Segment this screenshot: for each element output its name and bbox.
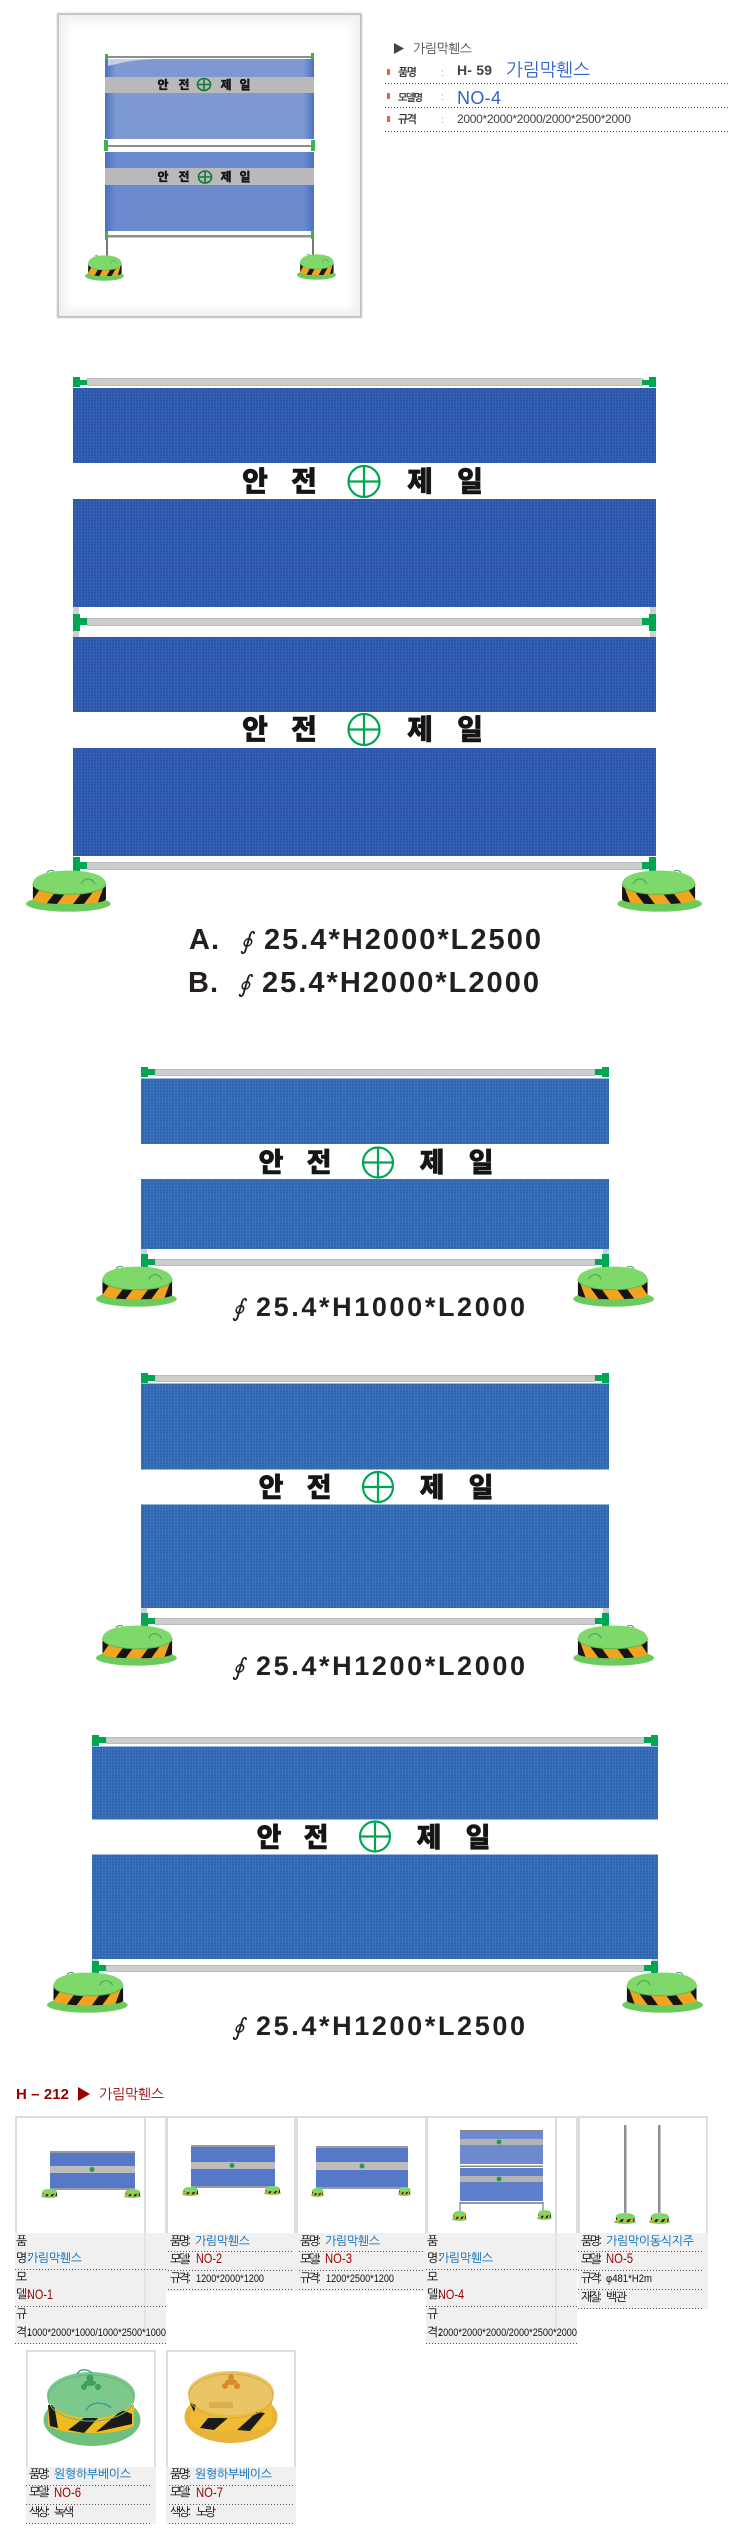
card: NO-4: 규: [427, 2308, 438, 2320]
card: NO-3: NO-3: [325, 2250, 352, 2266]
card: NO-5: [578, 2117, 708, 2309]
card: NO-5: 백관: [606, 2291, 627, 2303]
diagram: fence H1200 L2500: 제: [417, 1816, 441, 1855]
diagram: fence H1200 L2000: 제: [420, 1466, 444, 1505]
card: NO-4: 가림막휀스: [438, 2251, 493, 2264]
panel: product photo frame: [57, 13, 362, 318]
dimension label B: 25.4*H2000*L2000: [262, 967, 539, 999]
card: NO-1: [15, 2117, 166, 2344]
dimension label A: ∮: [240, 927, 256, 955]
diagram: fence H1000 L2000: [96, 1067, 654, 1307]
card: NO-4: 모: [427, 2271, 438, 2283]
dimension label H1200 L2500: ∮: [232, 2013, 248, 2041]
card: NO-1: 격:: [16, 2326, 31, 2338]
diagram: fence H1200 L2000: [96, 1373, 654, 1666]
thumbnail fence: [452, 2130, 552, 2221]
card: NO-1: 규: [16, 2308, 27, 2320]
sign text 1: 일: [457, 460, 483, 500]
card: NO-7: [166, 2351, 296, 2524]
mesh panels: [73, 388, 656, 856]
diagram: fence H1200 L2000: 전: [307, 1466, 331, 1505]
thumbnail: yellow round base: [184, 2371, 278, 2443]
card: NO-1: 1000*2000*1000/1000*2500*1000: [27, 2327, 166, 2339]
card: NO-7: 노랑: [196, 2505, 216, 2518]
card: NO-2: NO-2: [196, 2250, 222, 2266]
card: NO-7: 모델:: [170, 2486, 191, 2498]
diagram: fence H1200 L2500: 안: [257, 1816, 282, 1855]
card: NO-5: 모델:: [581, 2253, 602, 2265]
card: NO-4: NO-4: [438, 2286, 464, 2302]
photo: fence with two panels: 전: [178, 168, 190, 185]
card: NO-1: 모: [16, 2271, 27, 2283]
photo: fence with two panels: [85, 53, 336, 281]
diagram: fence H1000 L2000: 제: [420, 1141, 444, 1180]
sign text 1: 전: [291, 460, 317, 500]
diagram: double fence A/B: [26, 377, 702, 912]
product info row: model: :: [441, 92, 444, 103]
product info row: name: 품 명: [398, 66, 417, 78]
card: NO-6: [26, 2351, 156, 2524]
card: NO-1: NO-1: [27, 2286, 53, 2302]
sign text 2: 전: [291, 708, 317, 748]
sign text 1: 안: [242, 460, 268, 500]
dimension label H1200 L2500: 25.4*H1200*L2500: [256, 2011, 525, 2041]
sign text 1: 제: [407, 460, 433, 500]
diagram: fence H1000 L2000: 안: [259, 1141, 284, 1180]
sign text 2: 제: [407, 708, 433, 748]
card: NO-3: 품명:: [300, 2235, 321, 2247]
card: NO-2: 모델:: [170, 2253, 191, 2265]
card: NO-7: NO-7: [196, 2484, 223, 2500]
product info row: model: 모델명: [398, 92, 423, 103]
card: NO-5: 품명:: [581, 2235, 602, 2247]
card: NO-6: 모델:: [29, 2486, 50, 2498]
card: NO-3: 가림막휀스: [325, 2234, 380, 2247]
section heading H-212: H – 212: [16, 2086, 69, 2103]
product info heading: 가림막휀스: [413, 42, 472, 55]
card: NO-1: 명:: [16, 2252, 31, 2264]
card: NO-2: 가림막휀스: [195, 2234, 250, 2247]
section heading H-212: [16, 2086, 164, 2103]
photo: fence with two panels: 일: [239, 76, 251, 93]
dimension label H1000: ∮: [232, 1294, 248, 1322]
photo: fence with two panels: 제: [220, 76, 232, 93]
photo: fence with two panels: 제: [220, 168, 232, 185]
diagram: fence H1000 L2000: 일: [469, 1141, 493, 1180]
card: NO-4: 품: [427, 2235, 438, 2247]
card: NO-6: NO-6: [54, 2484, 81, 2500]
diagram: fence H1200 L2000: 일: [469, 1466, 493, 1505]
dimension label H1200 L2000: ∮: [232, 1653, 248, 1681]
card: NO-4: [426, 2117, 577, 2344]
product info row: spec: 규 격: [398, 113, 417, 125]
dimension label H1200 L2000: 25.4*H1200*L2000: [256, 1651, 525, 1681]
card: NO-5: φ481*H2m: [606, 2273, 652, 2285]
dimension label H1000: 25.4*H1000*L2000: [256, 1292, 525, 1322]
card: NO-6: 녹색: [54, 2506, 74, 2518]
thumbnail fence: [182, 2145, 281, 2196]
product info row: name: H- 59: [457, 62, 492, 78]
product info row: spec: [385, 112, 730, 132]
dimension label A: A.: [189, 924, 219, 956]
thumbnail: green round base: [44, 2370, 140, 2446]
diagram: fence H1200 L2500: [47, 1735, 703, 2013]
product info row: model: [385, 88, 730, 108]
photo: fence with two panels: 일: [239, 168, 251, 185]
card: NO-3: [296, 2117, 426, 2291]
diagram: fence H1000 L2000: 전: [307, 1141, 331, 1180]
product info row: name: 가림막휀스: [506, 61, 590, 79]
card: NO-5: 규격:: [581, 2272, 602, 2284]
sign text 2: 일: [457, 708, 483, 748]
thumbnail fence: [41, 2151, 141, 2198]
card: NO-7: 색상:: [170, 2506, 191, 2518]
card: NO-6: 원형하부베이스: [54, 2468, 131, 2480]
card: NO-5: NO-5: [606, 2250, 633, 2266]
diagram: fence H1200 L2500: 전: [304, 1816, 328, 1855]
product info row: spec: :: [441, 115, 444, 126]
thumbnail poles: [614, 2125, 670, 2224]
dimension label B: ∮: [238, 970, 254, 998]
product info row: name: :: [441, 68, 444, 79]
card: NO-7: 품명:: [170, 2468, 191, 2480]
card: NO-1: 품: [16, 2235, 27, 2247]
sign text 2: [242, 708, 483, 748]
connectors: [73, 377, 656, 387]
card: NO-4: 명:: [427, 2252, 442, 2264]
diagram: fence H1200 L2500: 일: [466, 1816, 490, 1855]
card: NO-1: 가림막휀스: [27, 2251, 82, 2264]
card: NO-4: 델:: [427, 2288, 442, 2300]
concrete bases: [26, 870, 111, 912]
card: NO-1: 델:: [16, 2288, 31, 2300]
product info row: name: [385, 61, 730, 84]
product info row: spec: 2000*2000*2000/2000*2500*2000: [457, 112, 631, 126]
photo: fence with two panels: 안: [157, 168, 169, 185]
product info row: model: NO-4: [457, 88, 501, 108]
sign text 2: 안: [242, 708, 268, 748]
card: NO-6: 품명:: [29, 2468, 50, 2480]
card: NO-2: [166, 2117, 296, 2291]
card: NO-5: 재질:: [581, 2290, 602, 2303]
thumbnail fence: [311, 2146, 411, 2197]
card: NO-6: 색상:: [29, 2506, 50, 2518]
section heading H-212: 가림막휀스: [99, 2087, 164, 2102]
card: NO-3: 규격:: [300, 2272, 321, 2284]
card: NO-2: 1200*2000*1200: [196, 2273, 264, 2285]
dimension label A: 25.4*H2000*L2500: [264, 924, 541, 956]
card: NO-2: 품명:: [170, 2235, 191, 2247]
card: NO-5: 가림막이동식지주: [606, 2234, 694, 2247]
photo: fence with two panels: 안: [157, 76, 169, 93]
card: NO-4: 2000*2000*2000/2000*2500*2000: [438, 2327, 577, 2339]
card: NO-4: 격:: [427, 2326, 442, 2338]
card: NO-7: 원형하부베이스: [195, 2468, 272, 2480]
card: NO-3: 1200*2500*1200: [326, 2273, 394, 2285]
diagram: fence H1200 L2000: 안: [259, 1466, 284, 1505]
card: NO-2: 규격:: [170, 2272, 191, 2284]
card: NO-3: 모델:: [300, 2253, 321, 2265]
photo: fence with two panels: 전: [178, 76, 190, 93]
sign text 1: [242, 460, 483, 500]
dimension label B: B.: [188, 967, 218, 999]
